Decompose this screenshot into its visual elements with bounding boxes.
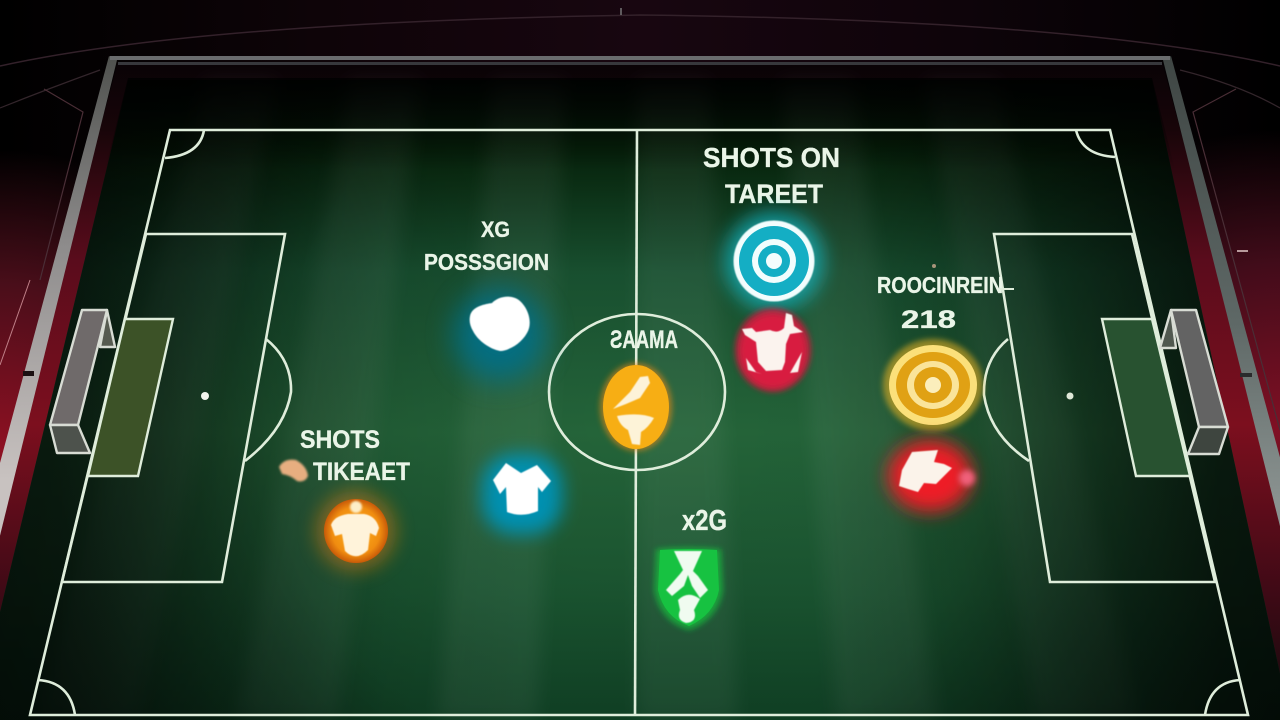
left penalty spot xyxy=(201,392,209,400)
label: shots target xyxy=(300,426,410,486)
label: shots on target xyxy=(703,142,840,209)
pitch markings xyxy=(30,130,1248,715)
label: centre stat: ƧAAMA xyxy=(610,326,678,354)
label: shots target: TIKEAET xyxy=(313,458,410,486)
icon: orange centre marker xyxy=(600,363,672,451)
icon: blue heart marker xyxy=(454,289,546,381)
icon: cyan target xyxy=(724,211,824,311)
label: shots target: SHOTS xyxy=(300,426,380,454)
right goal area xyxy=(1102,319,1190,476)
icon: gold target xyxy=(883,339,983,431)
icon: blue shirt marker xyxy=(482,454,562,534)
icon: peach blob xyxy=(279,460,308,481)
label: rooting stat: ROOCINREIN xyxy=(877,272,1003,298)
right goal xyxy=(1160,310,1228,454)
label: x2g: x2G xyxy=(682,505,727,537)
icon: green shield marker xyxy=(654,548,723,630)
label: shots on target: TAREET xyxy=(725,179,823,209)
icon: red splash marker xyxy=(888,440,975,512)
icon: orange shirt marker xyxy=(316,491,396,571)
left goal xyxy=(50,310,115,453)
right penalty spot xyxy=(1066,392,1074,400)
label: rooting stat xyxy=(877,264,1014,334)
left goal area xyxy=(88,319,173,476)
label: xg possession: XG xyxy=(481,217,510,242)
label: rooting stat: 218 xyxy=(901,306,956,334)
label: xg possession: POSSSGION xyxy=(424,249,549,275)
icon: red marker xyxy=(735,308,811,392)
label: xg possession xyxy=(424,217,549,275)
label: shots on target: SHOTS ON xyxy=(703,142,840,173)
